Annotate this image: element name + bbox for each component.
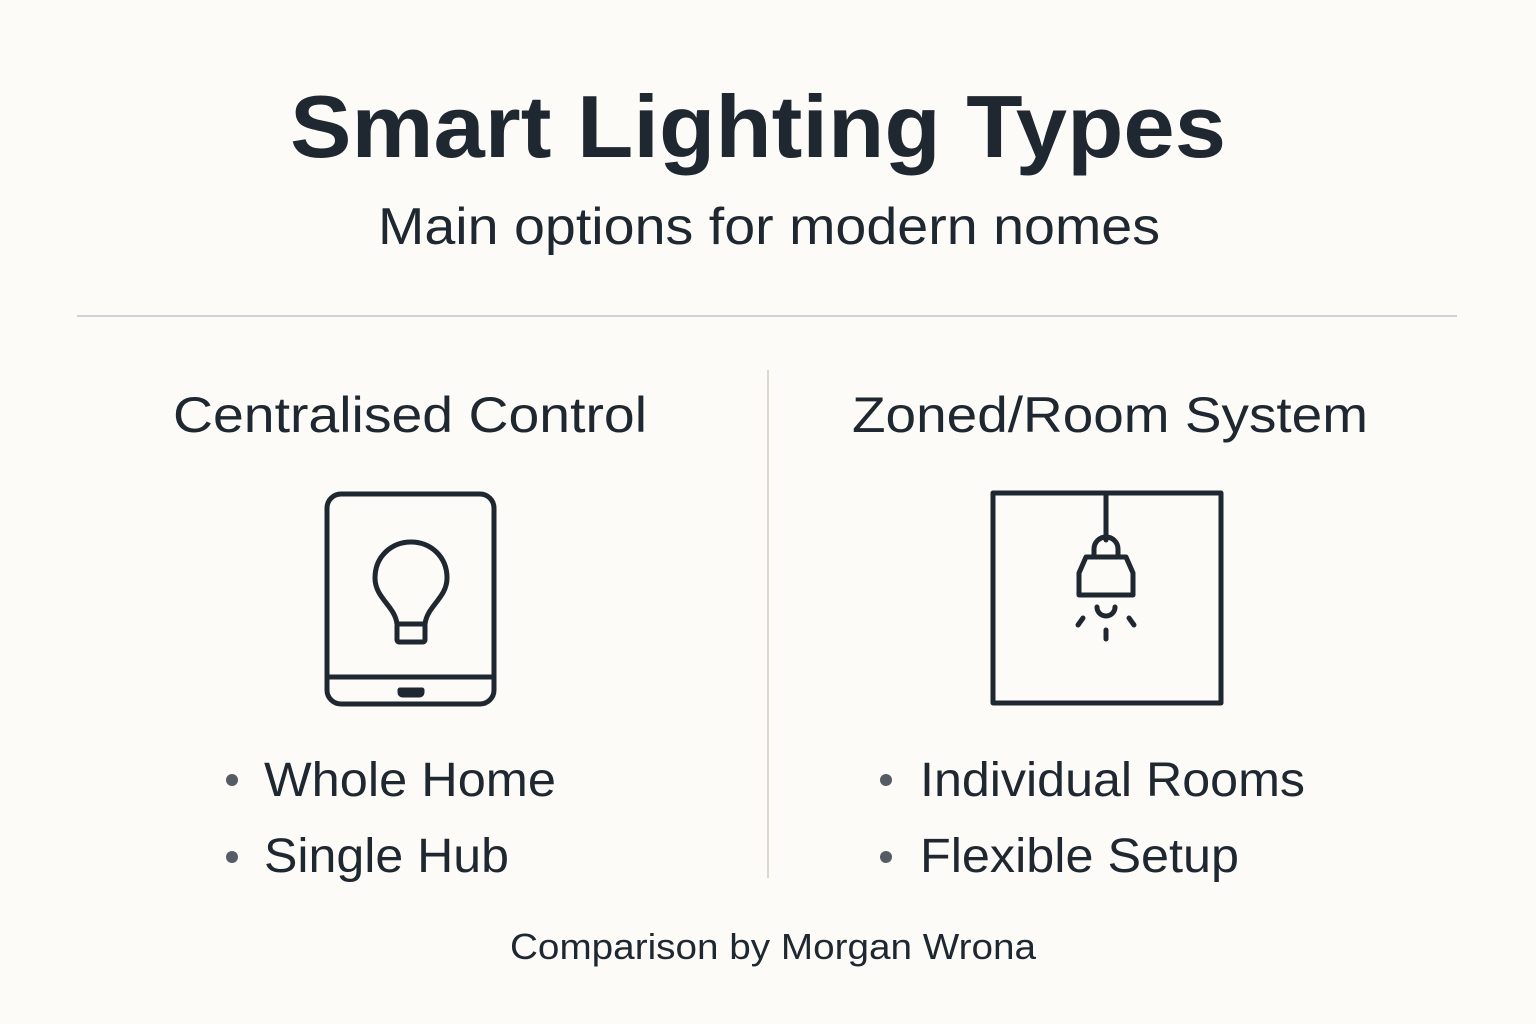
title: Smart Lighting Types [290, 77, 1226, 176]
subtitle: Main options for modern nomes [378, 198, 1160, 256]
bullet list: zoned: Individual Rooms [920, 754, 1305, 807]
bullet list: centralised [226, 754, 556, 883]
heading: centralised control: Centralised Control [173, 387, 647, 443]
icon: room with pendant lamp [993, 493, 1221, 703]
icon: tablet with bulb [327, 494, 494, 704]
bullet list: zoned: Flexible Setup [920, 830, 1239, 883]
bullet list: centralised: Whole Home [264, 754, 556, 807]
bullet list: zoned [880, 754, 1305, 883]
panel: centralised control [173, 387, 647, 883]
panel: zoned room system [852, 387, 1368, 883]
bullet list: centralised: Single Hub [264, 830, 509, 883]
heading: zoned room: Zoned/Room System [852, 387, 1368, 443]
footer credit: Comparison by Morgan Wrona [510, 926, 1037, 967]
